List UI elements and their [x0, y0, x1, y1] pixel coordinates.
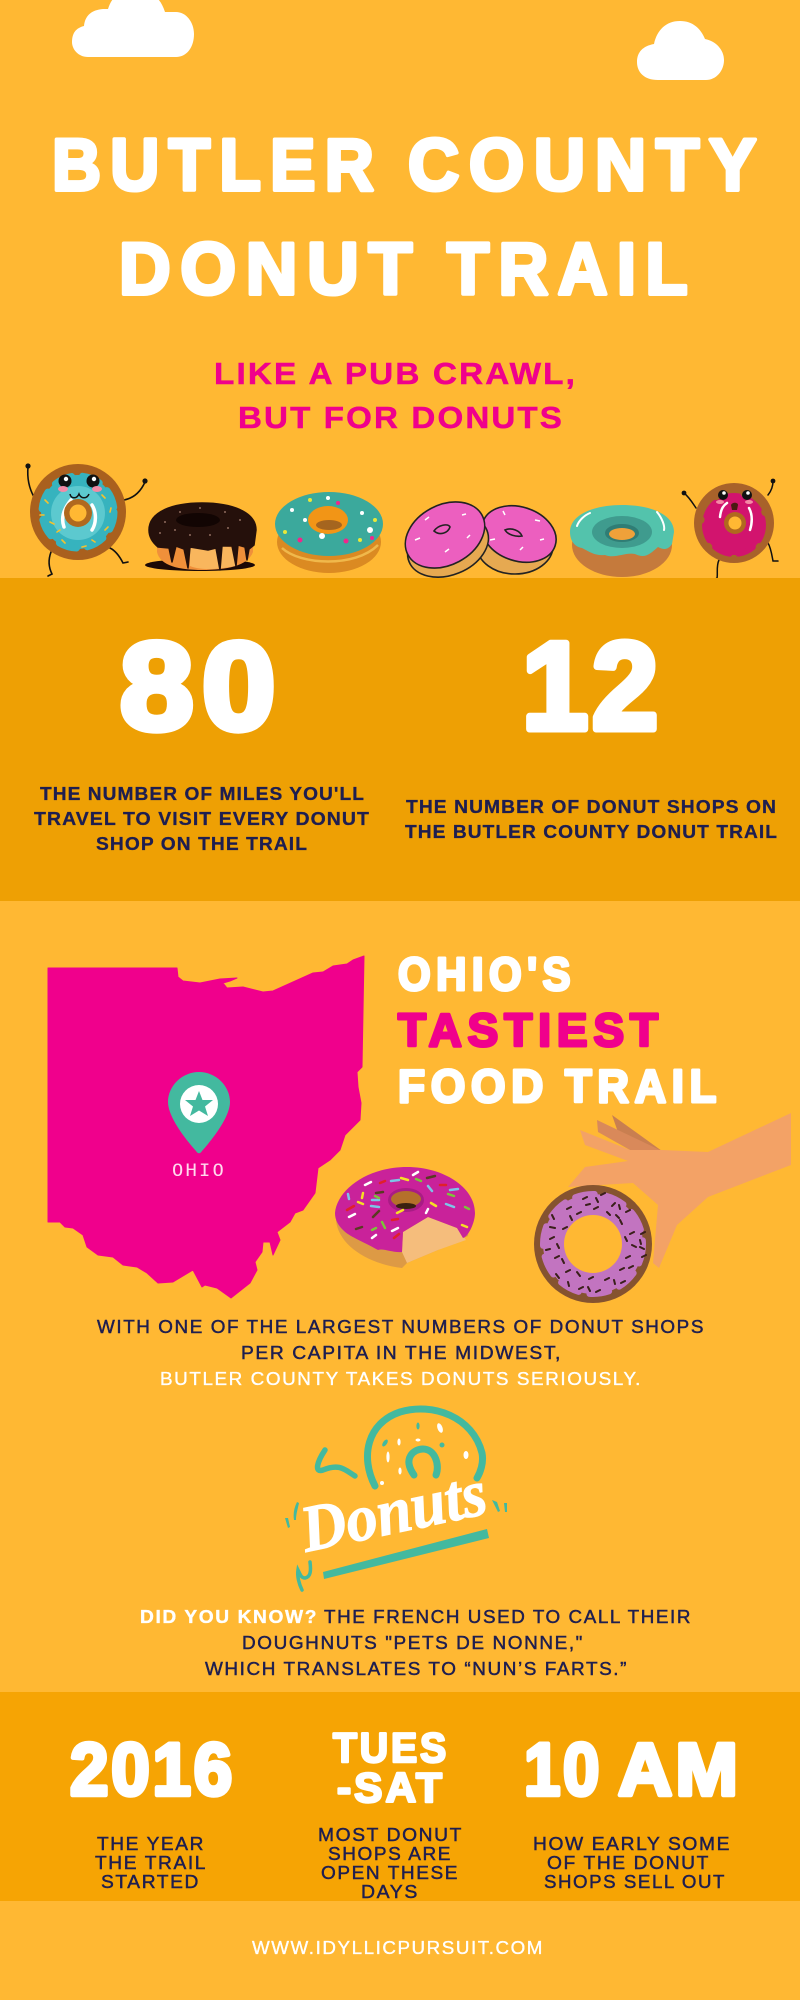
- stat: 12: 12: [522, 618, 662, 756]
- stat: 80: [34, 618, 370, 854]
- cloud: top right: [637, 21, 724, 80]
- title: [52, 125, 766, 310]
- subtitle: BUT FOR DONUTS: [238, 400, 564, 435]
- title: TRAIL: [447, 229, 697, 310]
- title: BUTLER: [52, 125, 383, 206]
- fact: 10 AM: OF THE DONUT: [547, 1853, 710, 1873]
- fact: Tues-Sat: MOST DONUT: [318, 1825, 463, 1845]
- icon: map pin: [168, 1072, 230, 1153]
- fact: 10 AM: [524, 1728, 741, 1892]
- fact: Tues-Sat: DAYS: [361, 1882, 419, 1902]
- icon: mint glazed donut: [570, 505, 674, 577]
- icon: chocolate donut: [145, 503, 256, 571]
- fact: 10 AM: SHOPS SELL OUT: [544, 1872, 726, 1892]
- map label: OHIO: [172, 1161, 226, 1181]
- text block: donut shops per capita: [97, 1317, 705, 1389]
- fact: Tues-Sat: [318, 1724, 463, 1902]
- donut row: [25, 463, 778, 589]
- stat: 12: THE BUTLER COUNTY DONUT TRAIL: [405, 822, 778, 842]
- illustration: bitten pink donut: [335, 1167, 475, 1268]
- heading: Ohio's tastiest food trail: OHIO'S: [398, 948, 576, 1000]
- stat: 80: THE NUMBER OF MILES YOU'LL: [40, 784, 365, 804]
- illustration: hand holding purple donut: [534, 1113, 791, 1303]
- fact: 2016: STARTED: [101, 1872, 200, 1892]
- icon: teal sprinkle donut: [275, 492, 383, 573]
- map: Ohio: [48, 956, 364, 1298]
- footer: website: WWW.IDYLLICPURSUIT.COM: [252, 1938, 544, 1958]
- logo: Donuts lettering: [285, 1409, 507, 1590]
- fact: Tues-Sat: SHOPS ARE: [328, 1844, 452, 1864]
- stat: 12: THE NUMBER OF DONUT SHOPS ON: [406, 797, 777, 817]
- fact: 2016: [70, 1728, 235, 1892]
- logo: Donuts lettering: Donuts: [293, 1456, 493, 1567]
- fact: 10 AM: HOW EARLY SOME: [533, 1834, 731, 1854]
- icon: two pink donuts: [394, 489, 563, 589]
- text block: did you know: WHICH TRANSLATES TO “NUN’S FARTS.”: [205, 1659, 628, 1679]
- fact: 2016: THE TRAIL: [95, 1853, 207, 1873]
- subtitle: [214, 356, 577, 435]
- stat: 80: TRAVEL TO VISIT EVERY DONUT: [34, 809, 370, 829]
- text block: donut shops per capita: PER CAPITA IN THE MIDWEST,: [241, 1343, 562, 1363]
- fact: 2016: THE YEAR: [97, 1834, 205, 1854]
- heading: Ohio's tastiest food trail: FOOD: [398, 1060, 549, 1112]
- icon: happy teal donut: [25, 463, 148, 576]
- panel: trail facts: [0, 1692, 800, 1902]
- fact: Tues-Sat: -SAT: [337, 1764, 445, 1811]
- fact: 2016: 2016: [70, 1728, 235, 1811]
- icon: happy pink donut: [682, 479, 778, 580]
- text block: donut shops per capita: BUTLER COUNTY TAKES DONUTS SERIOUSLY.: [160, 1369, 642, 1389]
- panel: key numbers: [0, 578, 800, 901]
- stat: 12: [405, 618, 778, 842]
- heading: Ohio's tastiest food trail: TRAIL: [565, 1060, 722, 1112]
- text block: did you know: DOUGHNUTS "PETS DE NONNE,": [242, 1633, 584, 1653]
- text block: did you know: [140, 1607, 692, 1679]
- text block: did you know: THE FRENCH USED TO CALL THEIR: [324, 1607, 692, 1627]
- title: COUNTY: [408, 125, 766, 206]
- fact: 10 AM: 10: [524, 1728, 602, 1811]
- text block: donut shops per capita: WITH ONE OF THE LARGEST NUMBERS OF DONUT SHOPS: [97, 1317, 705, 1337]
- fact: Tues-Sat: TUES: [333, 1724, 449, 1771]
- subtitle: LIKE A PUB CRAWL,: [214, 356, 577, 391]
- stat: 80: SHOP ON THE TRAIL: [96, 834, 308, 854]
- heading: Ohio's tastiest food trail: [398, 948, 722, 1112]
- stat: 80: 80: [120, 618, 284, 756]
- fact: 10 AM: AM: [618, 1728, 741, 1811]
- fact: Tues-Sat: OPEN THESE: [321, 1863, 459, 1883]
- text block: did you know: DID YOU KNOW?: [140, 1607, 318, 1627]
- heading: Ohio's tastiest food trail: TASTIEST: [398, 1004, 664, 1056]
- cloud: top left: [72, 0, 194, 57]
- title: DONUT: [119, 229, 422, 310]
